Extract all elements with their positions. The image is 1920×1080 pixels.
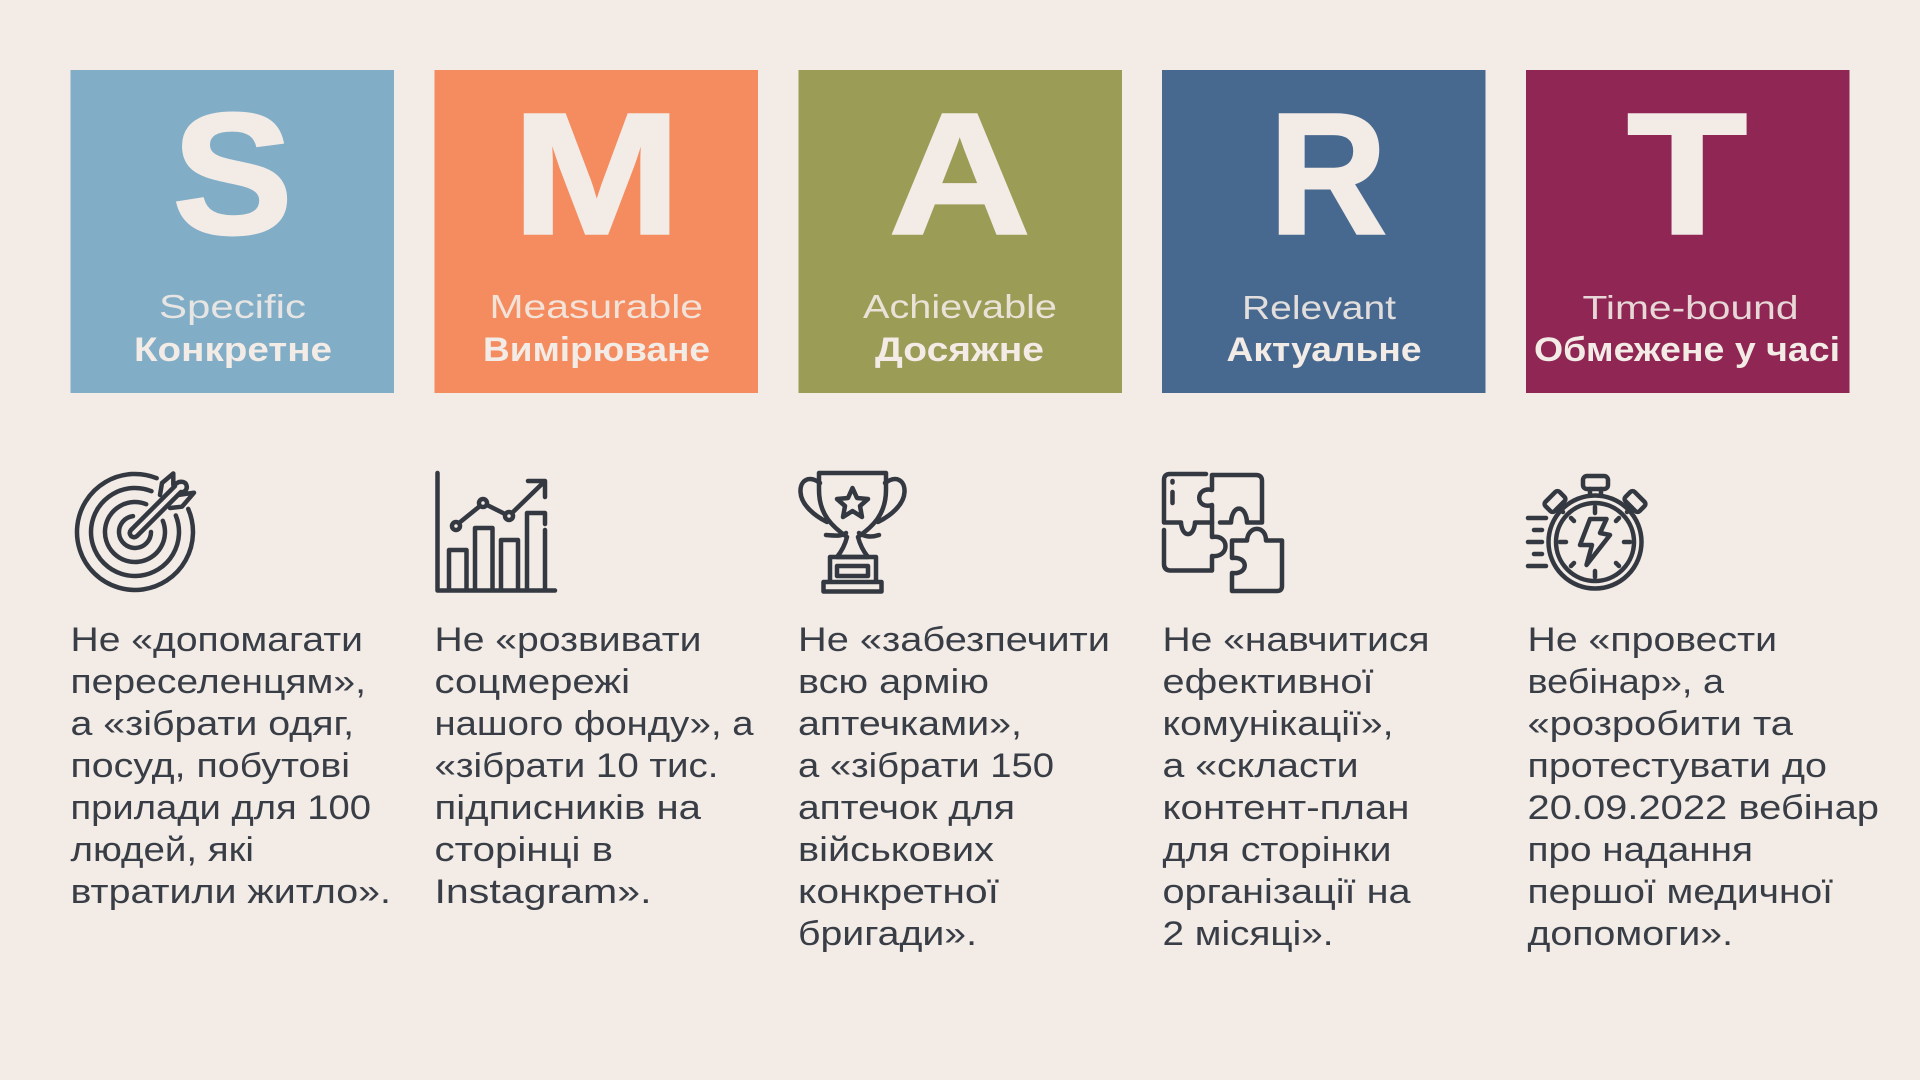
text block: Specific example: Не «допомагати [70, 621, 363, 659]
text block: Time-bound example: «розробити та [1528, 705, 1793, 743]
letter A: A [889, 76, 1031, 270]
panel: T Time-bound [1526, 70, 1850, 393]
label: Актуальне: Актуальне [1226, 331, 1422, 369]
text block: Relevant example: 2 місяці». [1162, 915, 1334, 953]
text block: Time-bound example: 20.09.2022 вебінар [1528, 789, 1879, 827]
text block: Specific example: втратили житло». [70, 873, 391, 911]
label: Relevant: Relevant [1242, 289, 1396, 326]
text block: Time-bound example: протестувати до [1528, 747, 1827, 785]
text block: Measurable example [434, 621, 754, 911]
letter R: R [1269, 76, 1387, 270]
text block: Achievable example: Не «забезпечити [798, 621, 1110, 659]
text block: Time-bound example: першої медичної [1528, 873, 1834, 911]
label: Specific: Specific [159, 288, 306, 325]
text block: Achievable example: конкретної [798, 873, 1000, 911]
text block: Measurable example: «зібрати 10 тис. [434, 747, 718, 785]
text block: Specific example: прилади для 100 [70, 789, 371, 827]
text block: Achievable example: всю армію [798, 663, 989, 701]
text block: Achievable example: аптечок для [798, 789, 1015, 827]
letter T: T [1627, 76, 1747, 270]
icon: target with arrow [77, 474, 194, 590]
label: Досяжне: Досяжне [875, 331, 1044, 369]
text block: Measurable example: Instagram». [434, 873, 652, 911]
panel: R Relevant [1162, 70, 1486, 393]
text block: Specific example: посуд, побутові [70, 747, 350, 785]
text block: Measurable example: соцмережі [434, 663, 630, 701]
icon: bar chart with rising arrow [438, 473, 555, 590]
icon: trophy with star [800, 473, 905, 592]
text block: Time-bound example: Не «провести [1528, 621, 1777, 659]
text block: Relevant example: контент-план [1162, 789, 1410, 827]
text block: Time-bound example: вебінар», а [1528, 663, 1724, 701]
text block: Specific example: а «зібрати одяг, [70, 705, 354, 743]
label: Обмежене у часі: Обмежене у часі [1534, 331, 1840, 369]
text block: Relevant example: Не «навчитися [1162, 621, 1430, 659]
text block: Relevant example: для сторінки [1162, 831, 1392, 869]
text block: Measurable example: сторінці в [434, 831, 613, 869]
text block: Achievable example: а «зібрати 150 [798, 747, 1054, 785]
text block: Measurable example: нашого фонду», а [434, 705, 754, 743]
text block: Achievable example: бригади». [798, 915, 977, 953]
panel: M Measurable [434, 70, 758, 393]
text block: Specific example [70, 621, 391, 911]
letter M: M [512, 76, 682, 270]
icon: puzzle pieces [1164, 474, 1282, 591]
text block: Specific example: переселенцям», [70, 663, 366, 701]
label: Measurable: Measurable [490, 288, 703, 325]
text block: Time-bound example [1528, 621, 1879, 953]
text block: Specific example: людей, які [70, 831, 254, 869]
label: Вимірюване: Вимірюване [483, 331, 710, 369]
icon: stopwatch with lightning [1528, 476, 1647, 588]
text block: Relevant example: організації на [1162, 873, 1411, 911]
text block: Relevant example: комунікації», [1162, 705, 1394, 743]
panel: S Specific [70, 70, 394, 393]
label: Конкретне: Конкретне [134, 331, 332, 369]
text block: Time-bound example: допомоги». [1528, 915, 1733, 953]
text block: Relevant example: а «скласти [1162, 747, 1358, 785]
label: Achievable: Achievable [863, 288, 1057, 325]
text block: Time-bound example: про надання [1528, 831, 1753, 869]
text block: Measurable example: Не «розвивати [434, 621, 702, 659]
panel: A Achievable [798, 70, 1122, 393]
label: Time-bound: Time-bound [1582, 289, 1798, 326]
text block: Achievable example: військових [798, 831, 994, 869]
text block: Measurable example: підписників на [434, 789, 701, 827]
text block: Relevant example: ефективної [1162, 663, 1374, 701]
text block: Achievable example: аптечками», [798, 705, 1022, 743]
letter S: S [172, 76, 293, 270]
text block: Relevant example [1162, 621, 1430, 953]
text block: Achievable example [798, 621, 1110, 953]
